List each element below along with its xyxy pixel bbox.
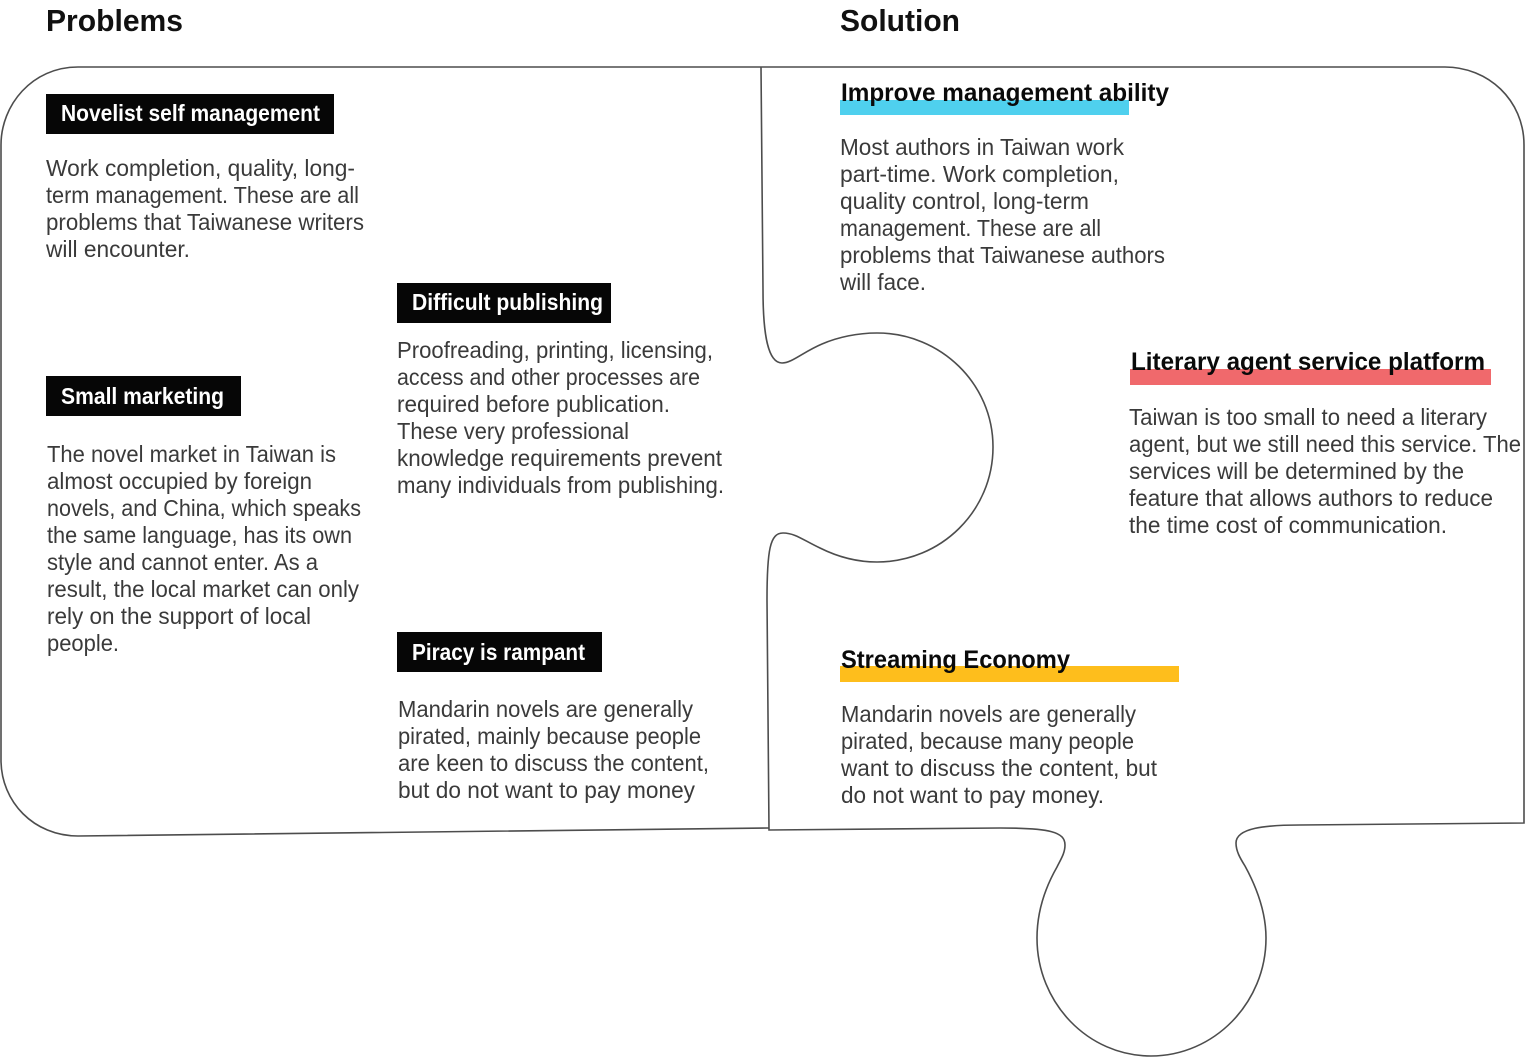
body text bbox=[840, 701, 1158, 808]
body text bbox=[47, 441, 361, 656]
label background bbox=[397, 283, 611, 323]
body text: knowledge requirements prevent bbox=[397, 445, 723, 471]
label: Novelist self management bbox=[61, 100, 320, 126]
body text: Mandarin novels are generally bbox=[841, 701, 1136, 727]
body text: Most authors in Taiwan work bbox=[840, 134, 1124, 160]
highlight bar bbox=[840, 100, 1129, 115]
body text: the same language, has its own bbox=[47, 522, 352, 548]
body text: but do not want to pay money bbox=[398, 777, 695, 803]
body text: Mandarin novels are generally bbox=[398, 696, 693, 722]
label background bbox=[46, 94, 334, 134]
problem: Piracy is rampant bbox=[397, 632, 709, 803]
body text bbox=[839, 134, 1165, 295]
body text: rely on the support of local bbox=[47, 603, 311, 629]
panel outline: solution bbox=[761, 67, 1524, 1056]
body text: do not want to pay money. bbox=[841, 782, 1104, 808]
heading: Improve management ability bbox=[841, 79, 1169, 107]
body text: These very professional bbox=[397, 418, 629, 444]
body text: many individuals from publishing. bbox=[397, 472, 724, 498]
problem: Difficult publishing bbox=[397, 283, 724, 498]
body text bbox=[1129, 404, 1521, 538]
label: Small marketing bbox=[61, 383, 224, 409]
body text: access and other processes are bbox=[397, 364, 700, 390]
solution: Literary agent service platform bbox=[1129, 348, 1521, 538]
body text: Taiwan is too small to need a literary bbox=[1129, 404, 1487, 430]
body text: pirated, mainly because people bbox=[398, 723, 701, 749]
body text: problems that Taiwanese writers bbox=[46, 209, 364, 235]
body text: the time cost of communication. bbox=[1129, 512, 1447, 538]
label: Piracy is rampant bbox=[412, 639, 585, 665]
solution: Streaming Economy bbox=[840, 646, 1179, 808]
body text: almost occupied by foreign bbox=[47, 468, 312, 494]
body text: management. These are all bbox=[840, 215, 1101, 241]
body text: term management. These are all bbox=[46, 182, 359, 208]
label background bbox=[397, 632, 602, 672]
body text: Work completion, quality, long- bbox=[46, 155, 355, 181]
heading: Literary agent service platform bbox=[1131, 348, 1485, 376]
body text: quality control, long-term bbox=[840, 188, 1089, 214]
body text: want to discuss the content, but bbox=[840, 755, 1158, 781]
body text: will face. bbox=[839, 269, 926, 295]
body text: are keen to discuss the content, bbox=[398, 750, 709, 776]
body text: pirated, because many people bbox=[841, 728, 1134, 754]
body text: will encounter. bbox=[45, 236, 190, 262]
panel outline: problems bbox=[1, 67, 769, 836]
problem: Novelist self management bbox=[45, 94, 364, 262]
problem: Small marketing bbox=[46, 376, 361, 656]
body text: problems that Taiwanese authors bbox=[840, 242, 1165, 268]
body text: people. bbox=[47, 630, 119, 656]
highlight bar bbox=[840, 666, 1179, 682]
heading: Streaming Economy bbox=[841, 646, 1070, 674]
body text: novels, and China, which speaks bbox=[47, 495, 361, 521]
label: Difficult publishing bbox=[412, 289, 603, 315]
label background bbox=[46, 376, 241, 416]
body text bbox=[45, 155, 364, 262]
body text: required before publication. bbox=[397, 391, 670, 417]
highlight bar bbox=[1130, 369, 1491, 385]
body text bbox=[398, 696, 709, 803]
body text: style and cannot enter. As a bbox=[47, 549, 318, 575]
body text: feature that allows authors to reduce bbox=[1129, 485, 1493, 511]
title: Solution: Solution bbox=[840, 3, 960, 38]
body text: Proofreading, printing, licensing, bbox=[397, 337, 713, 363]
body text: The novel market in Taiwan is bbox=[47, 441, 336, 467]
solution: Improve management ability bbox=[839, 79, 1169, 295]
body text: part-time. Work completion, bbox=[840, 161, 1119, 187]
body text: services will be determined by the bbox=[1129, 458, 1464, 484]
body text: result, the local market can only bbox=[47, 576, 359, 602]
title: Problems: Problems bbox=[46, 3, 183, 38]
body text bbox=[397, 337, 724, 498]
